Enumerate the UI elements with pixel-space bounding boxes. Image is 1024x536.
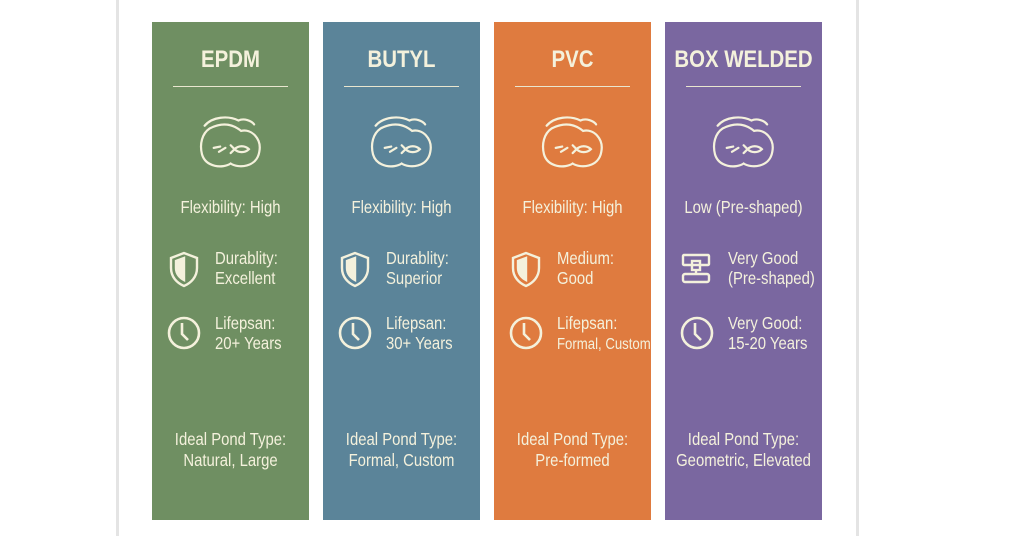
text: flexibility: Flexibility: High xyxy=(180,197,281,217)
text: ideal pond type: Ideal Pond Type: xyxy=(688,429,799,449)
text: lifespan xyxy=(557,313,651,353)
icon: shield xyxy=(170,252,198,288)
heading: BUTYL: BUTYL xyxy=(368,46,436,73)
text: ideal pond type xyxy=(175,429,286,470)
icon: shield xyxy=(512,252,540,288)
text: ideal pond type: Pre-formed xyxy=(535,450,610,470)
heading: PVC: PVC xyxy=(552,46,593,73)
icon: clock xyxy=(168,316,200,350)
panel: PVC xyxy=(494,22,651,520)
text: durability: Superior xyxy=(386,268,442,288)
text: durability xyxy=(728,248,815,288)
text: lifespan xyxy=(386,313,453,353)
icon: pond xyxy=(542,116,603,168)
panel: BUTYL xyxy=(323,22,480,520)
text: ideal pond type xyxy=(346,429,457,470)
heading: BOX WELDED: BOX WELDED xyxy=(674,46,813,73)
text: durability xyxy=(215,248,278,288)
text: ideal pond type: Formal, Custom xyxy=(349,450,454,470)
text: ideal pond type xyxy=(517,429,628,470)
icon: clock xyxy=(510,316,542,350)
icon: clock xyxy=(338,316,372,350)
text: ideal pond type xyxy=(676,429,811,470)
text: flexibility: Flexibility: High xyxy=(522,197,623,217)
text: durability: Durablity: xyxy=(386,248,449,268)
text: durability: Medium: xyxy=(557,248,614,268)
icon: box structure xyxy=(682,254,710,284)
text: durability: Good xyxy=(557,268,593,288)
icon: pond xyxy=(200,116,261,168)
text: flexibility: Low (Pre-shaped) xyxy=(684,197,803,217)
icon: clock xyxy=(680,316,714,350)
text: ideal pond type: Natural, Large xyxy=(183,450,278,470)
text: ideal pond type: Ideal Pond Type: xyxy=(346,429,457,449)
icon: pond xyxy=(712,116,774,168)
text: flexibility: Flexibility: High xyxy=(351,197,452,217)
text: durability: Very Good xyxy=(728,248,798,268)
text: durability: Excellent xyxy=(215,268,275,288)
text: durability xyxy=(386,248,449,288)
text: ideal pond type: Ideal Pond Type: xyxy=(175,429,286,449)
panel: BOX WELDED xyxy=(665,22,822,520)
text: lifespan: 30+ Years xyxy=(386,333,453,353)
text: lifespan: Lifepsan: xyxy=(386,313,446,333)
heading: EPDM: EPDM xyxy=(201,46,260,73)
icon: shield xyxy=(340,252,370,288)
text: lifespan: Lifepsan: xyxy=(215,313,275,333)
text: durability: (Pre-shaped) xyxy=(728,268,815,288)
text: lifespan xyxy=(728,313,807,353)
text: durability xyxy=(557,248,614,288)
text: ideal pond type: Ideal Pond Type: xyxy=(517,429,628,449)
text: lifespan: Formal, Custom xyxy=(557,336,651,353)
text: lifespan: 15-20 Years xyxy=(728,333,807,353)
text: lifespan xyxy=(215,313,282,353)
text: lifespan: Lifepsan: xyxy=(557,313,617,333)
text: lifespan: 20+ Years xyxy=(215,333,282,353)
text: durability: Durablity: xyxy=(215,248,278,268)
text: lifespan: Very Good: xyxy=(728,313,802,333)
text: ideal pond type: Geometric, Elevated xyxy=(676,450,811,470)
panel: EPDM xyxy=(152,22,309,520)
icon: pond xyxy=(370,116,432,168)
